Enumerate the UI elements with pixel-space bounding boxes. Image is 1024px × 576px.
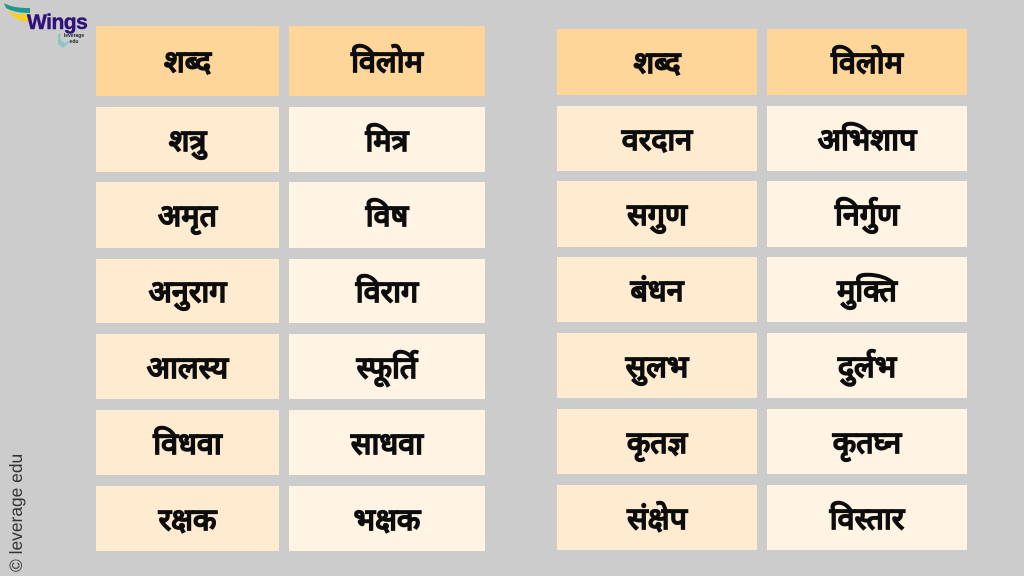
row: विष [289,182,485,248]
row: विधवा [96,410,279,475]
row: अनुराग: अनुराग [149,275,226,309]
left header: विलोम [289,26,485,96]
copyright vertical text: © leverage edu [6,454,26,572]
row: वरदान [557,106,757,171]
row: वरदान: वरदान [622,123,692,157]
row: निर्गुण: निर्गुण [835,198,899,232]
right header: शब्द: शब्द [633,46,681,80]
row: सुलभ [557,333,757,398]
row: आलस्य: आलस्य [147,351,228,385]
row: संक्षेप: संक्षेप [627,502,687,536]
row: विधवा: विधवा [153,427,222,461]
row: आलस्य [96,334,279,399]
row: विराग: विराग [356,275,418,309]
row: निर्गुण [767,181,967,247]
row: सगुण: सगुण [627,198,687,232]
brand name: Wings [27,11,87,34]
row: कृतज्ञ: कृतज्ञ [627,426,687,460]
left header: शब्द: शब्द [164,45,211,79]
row: कृतघ्न: कृतघ्न [833,426,901,460]
right header: विलोम [767,29,967,95]
row: साधवा: साधवा [351,427,423,461]
row: कृतज्ञ [557,409,757,474]
row: दुर्लभ: दुर्लभ [838,350,896,384]
row: मित्र: मित्र [366,124,408,158]
row: अमृत [96,182,279,248]
row: विस्तार [767,485,967,550]
row: रक्षक [96,486,279,551]
row: सुलभ: सुलभ [626,350,688,384]
right header: शब्द [557,29,757,95]
right header: विलोम: विलोम [831,46,903,80]
row: शत्रु: शत्रु [169,124,206,158]
row: विराग [289,259,485,323]
row: स्फूर्ति [289,334,485,399]
row: दुर्लभ [767,333,967,398]
left header: विलोम: विलोम [351,45,423,79]
row: विस्तार: विस्तार [830,502,904,536]
row: संक्षेप [557,485,757,550]
brand byline: leverage [64,33,84,39]
row: शत्रु [96,107,279,172]
logo: Wings by leverage edu [4,3,88,48]
row: अभिशाप [767,106,967,171]
row: भक्षक: भक्षक [354,503,420,537]
row: भक्षक [289,486,485,551]
row: स्फूर्ति: स्फूर्ति [357,351,417,385]
left header: शब्द [96,26,279,96]
row: सगुण [557,181,757,247]
row: बंधन: बंधन [630,274,684,308]
row: अमृत: अमृत [158,199,217,233]
row: रक्षक: रक्षक [159,503,216,537]
row: विष: विष [366,199,408,233]
row: कृतघ्न [767,409,967,474]
row: अनुराग [96,259,279,323]
row: अभिशाप: अभिशाप [818,123,916,157]
brand byline [64,33,84,44]
brand byline: edu [70,38,78,44]
row: मुक्ति: मुक्ति [837,274,897,308]
row: मित्र [289,107,485,172]
row: बंधन [557,257,757,322]
row: मुक्ति [767,257,967,322]
row: साधवा [289,410,485,475]
